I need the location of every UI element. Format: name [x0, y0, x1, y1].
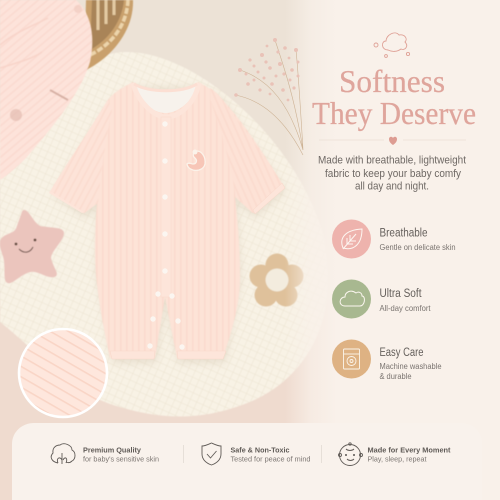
icon: washing machine: [344, 349, 360, 369]
icon: cloud: [340, 291, 364, 306]
description: fabric to keep your baby comfy: [325, 168, 461, 180]
bottom bar: [12, 423, 482, 500]
description: Made with breathable, lightweight: [318, 154, 467, 166]
wooden flower teether: [250, 254, 304, 306]
icon: shield check: [202, 443, 221, 465]
description: all day and night.: [355, 180, 429, 192]
icon: cotton: [51, 444, 75, 464]
title: [312, 63, 476, 131]
feature: easy care: Easy Care: [380, 347, 424, 359]
sleeve cuff: [253, 183, 285, 214]
romper shadow: [53, 87, 286, 363]
dried flowers: [234, 38, 303, 155]
badge: premium quality: [51, 444, 159, 464]
collar: [133, 83, 199, 117]
badge: made for every moment: Made for Every Moment: [368, 446, 451, 454]
heart divider: [319, 137, 466, 145]
icon: baby face: [338, 443, 362, 466]
icon: cloud and stars: [374, 33, 410, 57]
feature: easy care: Machine washable: [380, 362, 442, 371]
feature: breathable: Gentle on delicate skin: [380, 243, 456, 252]
feature: breathable: [332, 220, 456, 258]
badge: premium quality: for baby's sensitive skin: [83, 454, 159, 464]
feature: ultra soft: All-day comfort: [380, 304, 431, 313]
icon: leaf: [342, 229, 362, 249]
woven basket: [84, 0, 133, 71]
quilted mat: [0, 52, 328, 416]
badge: safe and non-toxic: [202, 443, 310, 465]
left sleeve: [50, 100, 112, 213]
badge: safe and non-toxic: Safe & Non-Toxic: [230, 446, 290, 454]
title: Softness: [339, 63, 445, 99]
inner neck: [134, 84, 197, 113]
feature: easy care: & durable: [380, 372, 412, 381]
feature: breathable: Breathable: [380, 228, 428, 240]
badge: made for every moment: Play, sleep, repeat: [368, 454, 427, 464]
pink muslin blanket: [0, 0, 92, 180]
feature: easy care: [332, 340, 442, 381]
badge: premium quality: Premium Quality: [83, 446, 142, 454]
right sleeve: [210, 88, 284, 213]
plush star: [2, 212, 62, 281]
romper: [49, 82, 286, 363]
title: They Deserve: [312, 95, 476, 131]
placket: [161, 117, 171, 297]
feature: ultra soft: [332, 280, 431, 318]
fabric swatch: [19, 329, 107, 417]
badge: safe and non-toxic: Tested for peace of mind: [230, 454, 310, 464]
romper body: [50, 82, 284, 358]
leg cuffs: [110, 351, 226, 359]
snap buttons: [147, 121, 185, 350]
badge: made for every moment: [338, 443, 451, 466]
feature: ultra soft: Ultra Soft: [380, 288, 422, 300]
description: [318, 154, 467, 192]
swan badge: [187, 150, 205, 170]
right panel fade: [285, 0, 500, 500]
